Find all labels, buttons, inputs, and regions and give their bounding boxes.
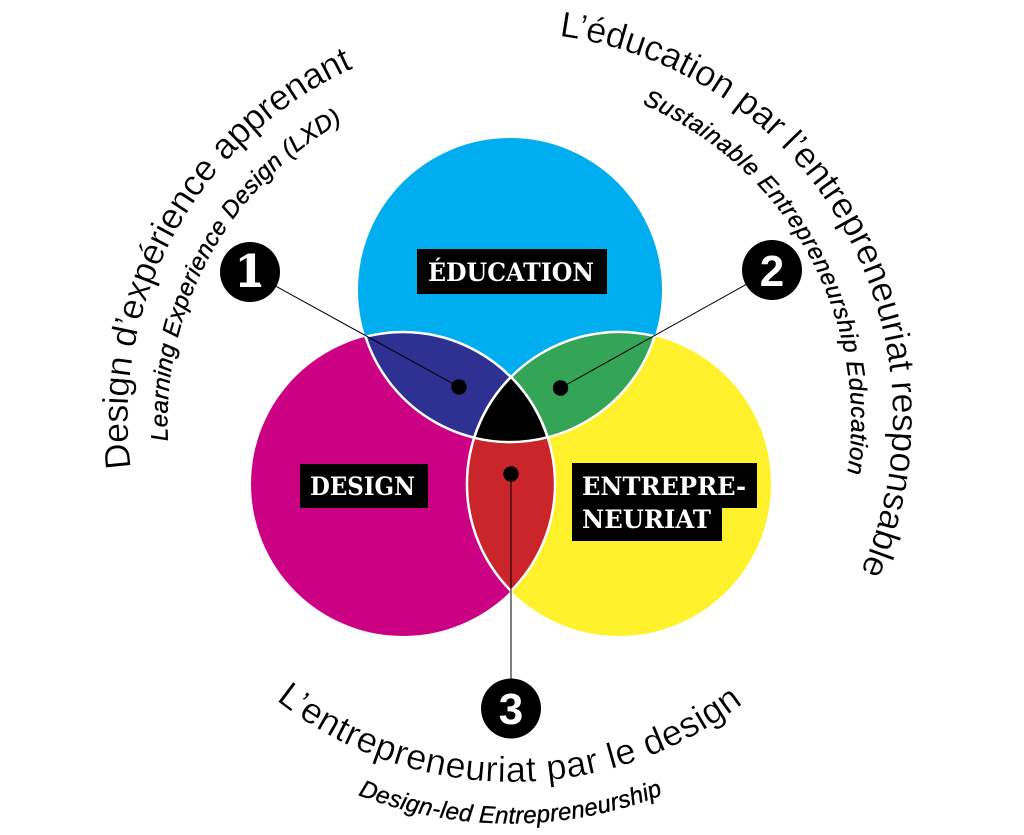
marker 3 with leader line: 3 [499,685,523,734]
marker 1 with leader line: 1 [234,245,266,298]
label: education: ÉDUCATION [428,258,594,287]
arc heading: education par l'entrepreneuriat responsable: L’éducation par l’entrepreneuriat responsable [562,12,913,576]
circle: education [358,138,662,442]
label: entrepreneuriat: ENTREPRE- [582,472,746,501]
label: design: DESIGN [310,472,415,501]
label: entrepreneuriat [572,463,757,541]
overlap: education and entrepreneurship [474,332,655,442]
marker 3 with leader line [481,466,541,738]
overlap: design and entrepreneurship [467,377,555,591]
label: education [417,249,607,294]
overlap: education and design [366,332,548,442]
marker 2 with leader line [553,240,802,396]
arc heading: entrepreneuriat par le design: L’entrepreneuriat par le design [278,682,742,788]
arc heading: design d'expérience apprenant: Design d’expérience apprenant [102,48,354,468]
marker 1 with leader line [220,242,467,395]
marker 2 with leader line: 2 [760,247,784,296]
arc subheading: design-led entrepreneurship: Design-led Entrepreneurship [358,780,660,828]
overlap: centre [474,377,548,442]
circle: design [251,332,555,636]
circle: entrepreneuriat [467,332,771,636]
arc subheading: sustainable entrepreneurship education: Sustainable Entrepreneurship Education [644,92,868,474]
arc subheading: learning experience design: Learning Experience Design (LXD) [150,108,340,440]
label: design [300,464,428,508]
label: entrepreneuriat: NEURIAT [582,505,711,534]
